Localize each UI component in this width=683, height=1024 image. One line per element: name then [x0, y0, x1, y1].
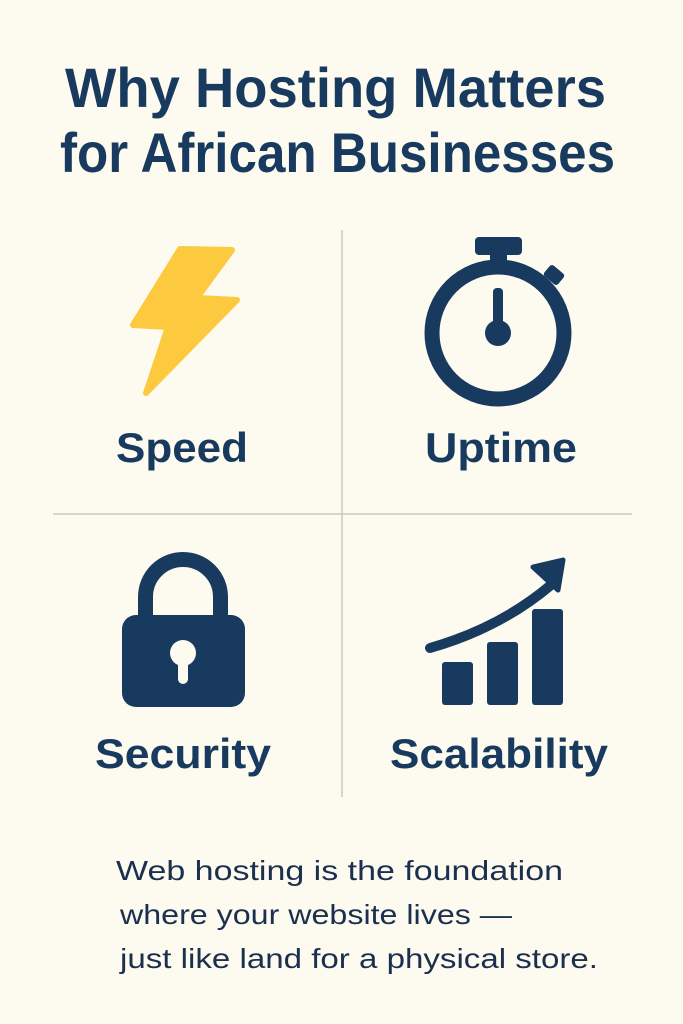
icon: lightning bolt	[133, 249, 237, 393]
label: scalability: Scalability	[390, 730, 609, 777]
text block: footer description: Web hosting is the foundation	[116, 855, 563, 886]
title: for African Businesses	[60, 121, 615, 184]
panel: speed	[116, 249, 248, 471]
text block: footer description: just like land for a physical store.	[119, 943, 598, 974]
panel: uptime	[425, 237, 577, 471]
label: speed: Speed	[116, 424, 248, 471]
title	[60, 56, 615, 184]
icon: stopwatch	[432, 237, 565, 399]
label: uptime: Uptime	[425, 424, 577, 471]
text block: footer description	[116, 855, 598, 974]
icon: padlock	[122, 560, 245, 707]
icon: growth chart	[430, 560, 563, 705]
text block: footer description: where your website lives —	[119, 899, 512, 930]
label: security: Security	[95, 730, 272, 777]
title: Why Hosting Matters	[65, 56, 606, 119]
panel: scalability	[390, 560, 609, 777]
panel: security	[95, 560, 272, 777]
